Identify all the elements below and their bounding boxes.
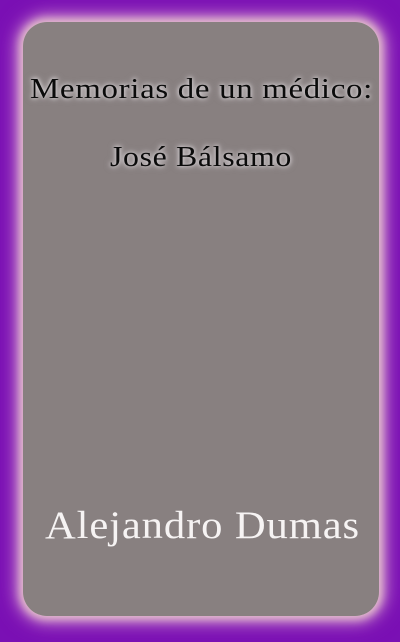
author name: Alejandro Dumas	[45, 504, 360, 547]
title: second line: José Bálsamo	[110, 141, 292, 173]
title: first line: Memorias de un médico:	[30, 73, 373, 105]
